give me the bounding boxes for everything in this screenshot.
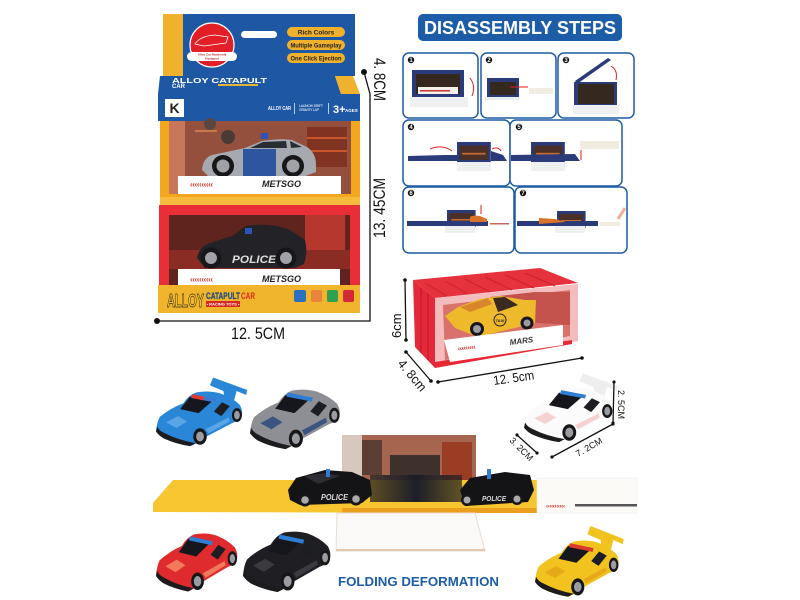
title: disassembly steps [418,14,622,41]
package blue label band: LAUNCH/ DRIFT [299,104,324,108]
black car on track left: POLICE [321,493,349,502]
package bottom band: CAR [241,291,255,301]
step 5 [510,120,622,186]
package blue label band: K [169,100,180,116]
black car on track right [460,469,534,506]
red container with taxi car [413,268,578,368]
package bottom band [158,285,360,313]
package blue label band: 3+ [333,104,346,116]
step 3: 3 [564,58,568,64]
white car dimensions: 7. 2CM [574,436,604,459]
step 7 [515,187,627,253]
red container with taxi car: MARS [509,335,534,347]
step 1 [403,53,478,118]
package bottom band: CATAPULT [206,291,240,301]
package blue label band: GRAVITY LAP [299,108,320,112]
step 4: 4 [409,125,413,131]
step 5: 5 [517,125,521,131]
gray police car [250,374,345,449]
package slanted band: CAR [172,84,186,90]
yellow track [153,480,537,513]
package blue label band: AGES [345,108,358,113]
backdrop [342,435,476,491]
step 3 [558,53,634,118]
black car on track right: POLICE [482,496,506,503]
step 7: 7 [521,191,525,197]
white car dimensions [508,380,626,463]
package bottom band: ALLOY [167,291,204,311]
yellow container with gray police car [160,118,360,205]
red container with taxi car: ‹‹‹‹‹‹‹‹‹ [457,344,477,353]
white track section: ‹‹‹‹‹‹‹‹‹‹‹ [546,504,565,510]
taxi car in container: TAXI [496,318,504,323]
package top flap: Equipped [205,56,219,60]
white car dimensions: 3. 2CM [508,435,535,463]
package dimension lines: 4. 8CM [370,58,389,101]
package top flap: One Click Ejection [290,56,342,62]
red container with black police car: METSGO [262,274,301,284]
step 6: 6 [409,191,413,197]
package bottom band: • RACING TOYS • [207,302,240,306]
step 2: 2 [487,58,491,64]
caption: folding deformation: FOLDING DEFORMATION [338,574,499,589]
package dimension lines: 12. 5CM [231,324,285,343]
package blue label band: ALLOY CAR [268,106,291,112]
step 1: 1 [409,58,413,64]
blue police car [156,377,247,446]
red police car [156,519,242,591]
container dimensions: 12. 5cm [492,367,535,388]
package blue label band [158,94,360,121]
red container with black police car: ‹‹‹‹‹‹‹‹‹‹ [190,275,213,284]
package top flap: Multiple Gameplay [290,44,342,50]
gray police car in package [202,133,316,179]
package slanted band: ALLOY CATAPULT [172,78,268,85]
package dimension lines: 13. 45CM [370,178,389,238]
white ambulance car [524,373,618,442]
white track section [537,478,637,513]
title: disassembly steps: DISASSEMBLY STEPS [424,18,616,38]
container dimensions [389,278,584,394]
package top flap: Rich Colors [298,30,335,36]
clear plastic sheet [336,513,485,551]
step 2 [481,53,556,118]
container dimensions: 6cm [389,313,404,338]
white car dimensions: 2. 5CM [616,390,626,419]
package top flap: Alloy Car Randomly [198,52,227,56]
package dimension lines [154,58,389,343]
step 4 [403,120,510,186]
yellow container with gray police car: ‹‹‹‹‹‹‹‹‹‹ [190,180,213,189]
yellow container with gray police car: METSGO [262,179,301,189]
red container with black police car [159,205,360,286]
yellow taxi car [535,526,624,597]
folding track play set [153,435,637,551]
package slanted band [158,76,360,94]
step 6 [403,187,514,253]
container dimensions: 4. 8cm [395,356,430,394]
black police car [243,516,336,592]
black car on track left [288,469,372,506]
taxi car in container [445,296,536,337]
package top flap [163,14,355,76]
black police car in package: POLICE [232,254,277,266]
black police car in package [197,225,306,268]
product package [158,14,360,313]
motion blur [370,475,462,502]
